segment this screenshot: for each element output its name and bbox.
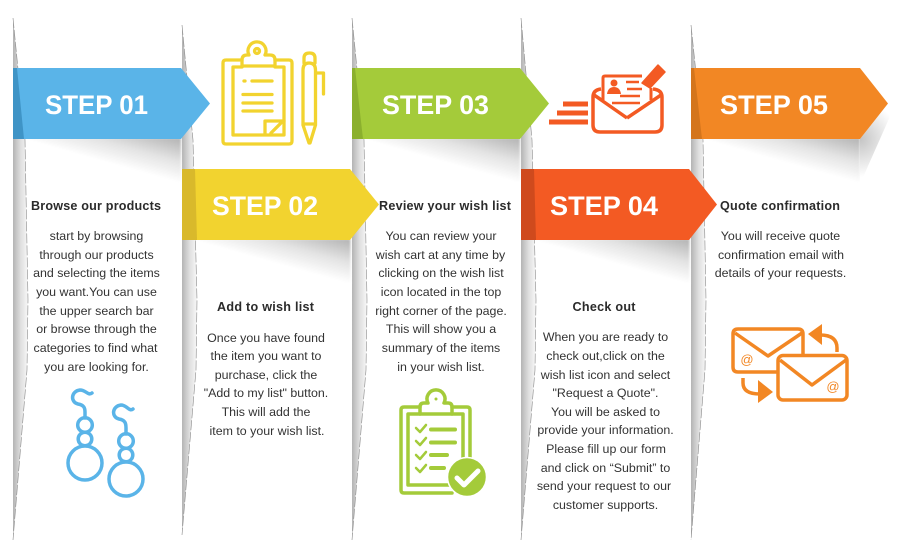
- text block: step 1: or browse through the: [36, 322, 157, 336]
- text block: step 1: the upper search bar: [39, 304, 154, 318]
- text block: step 3: clicking on the wish list: [378, 266, 504, 280]
- text block: step 3: Review your wish list: [379, 199, 512, 213]
- text block: step 5: Quote confirmation: [720, 199, 840, 213]
- text block: step 3: This will show you a: [386, 322, 496, 336]
- ribbon: step 2: [182, 169, 379, 240]
- text block: step 1: you are looking for.: [44, 360, 149, 374]
- text block: step 1: and selecting the items: [33, 266, 160, 280]
- text block: step 5: You will receive quote: [721, 229, 840, 243]
- label: step 3: STEP 03: [382, 90, 489, 120]
- text block: step 4: provide your information.: [537, 423, 674, 437]
- text block: step 3: You can review your: [385, 229, 497, 243]
- text block: step 4: Please fill up our form: [546, 442, 666, 456]
- text block: step 4: and click on “Submit” to: [541, 461, 670, 475]
- text block: step 1: through our products: [39, 248, 154, 262]
- tip shadow: step 5: [860, 106, 892, 184]
- text block: step 5: confirmation email with: [718, 248, 844, 262]
- text block: step 3: in your wish list.: [397, 360, 485, 374]
- ribbon: step 5: [691, 68, 888, 139]
- at sign: second envelope: @: [826, 379, 840, 394]
- text block: step 2: [204, 300, 328, 438]
- label: step 2: STEP 02: [212, 191, 318, 221]
- text block: step 4: [537, 300, 674, 512]
- text block: step 3: wish cart at any time by: [375, 248, 506, 262]
- fold strip 4: [521, 18, 536, 540]
- text block: step 4: customer supports.: [553, 498, 658, 512]
- text block: step 4: Check out: [572, 300, 636, 314]
- text block: step 5: [715, 199, 846, 280]
- fold strip 5: [691, 25, 706, 540]
- text block: step 2: Add to wish list: [217, 300, 315, 314]
- text block: step 1: [31, 199, 161, 374]
- text block: step 5: details of your requests.: [715, 266, 846, 280]
- ribbon shadow: step 1: [25, 138, 181, 183]
- text block: step 3: summary of the items: [382, 341, 500, 355]
- text block: step 4: wish list icon and select: [540, 368, 671, 382]
- fold strip 3: [352, 18, 367, 540]
- ribbon shadow: step 2: [194, 239, 350, 284]
- text block: step 1: Browse our products: [31, 199, 161, 213]
- icon: clipboard and pen: [223, 42, 324, 144]
- text block: step 1: you want.You can use: [36, 285, 157, 299]
- text block: step 3: icon located in the top: [381, 285, 501, 299]
- at sign: first envelope: @: [740, 352, 754, 367]
- text block: step 1: categories to find what: [34, 341, 158, 355]
- icon: exchanging envelopes: [733, 324, 847, 403]
- label: step 4: STEP 04: [550, 191, 658, 221]
- ribbon shadow: step 3: [364, 138, 520, 183]
- text block: step 4: "Request a Quote".: [553, 386, 658, 400]
- fold strip 2: [182, 25, 197, 535]
- text block: step 4: check out,click on the: [546, 349, 665, 363]
- icon: envelope with profile card: [549, 65, 665, 132]
- icon: checklist with check badge: [401, 390, 486, 496]
- text block: step 2: purchase, click the: [215, 368, 317, 382]
- fold strip 1: [13, 18, 28, 540]
- icon: earrings: [68, 390, 143, 496]
- label: step 5: STEP 05: [720, 90, 828, 120]
- label: step 1: STEP 01: [45, 90, 148, 120]
- text block: step 2: item to your wish list.: [210, 424, 324, 438]
- text block: step 4: You will be asked to: [551, 405, 660, 419]
- ribbon: step 4: [521, 169, 717, 240]
- text block: step 3: [375, 199, 512, 374]
- text block: step 2: the item you want to: [211, 349, 322, 363]
- ribbon shadow: step 5: [704, 138, 860, 184]
- text block: step 4: send your request to our: [537, 479, 671, 493]
- text block: step 2: This will add the: [222, 405, 311, 419]
- ribbon: step 1: [13, 68, 210, 139]
- text block: step 2: Once you have found: [207, 331, 325, 345]
- text block: step 3: right corner of the page.: [375, 304, 507, 318]
- ribbon: step 3: [352, 68, 549, 139]
- text block: step 1: start by browsing: [50, 229, 143, 243]
- text block: step 2: "Add to my list" button.: [204, 386, 328, 400]
- text block: step 4: When you are ready to: [543, 330, 668, 344]
- ribbon shadow: step 4: [534, 239, 690, 284]
